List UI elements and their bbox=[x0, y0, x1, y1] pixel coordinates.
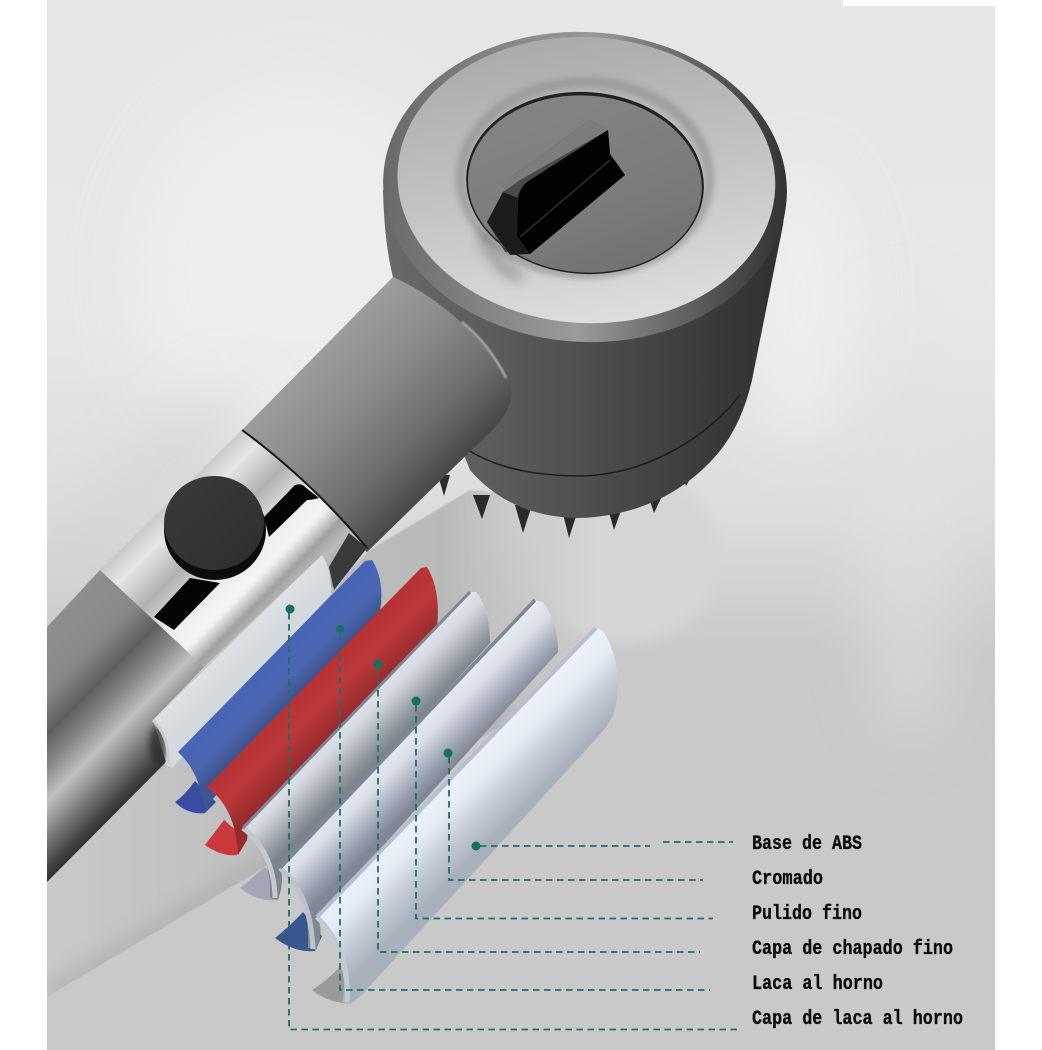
slot grip bbox=[487, 120, 625, 255]
collar joint lines bbox=[242, 430, 367, 548]
leader line: Capa de chapado fino bbox=[374, 660, 700, 952]
shadow under the handle bbox=[47, 490, 544, 996]
collar dark wedge bbox=[329, 533, 367, 590]
upper handle neck bbox=[242, 277, 512, 552]
dark handle end bbox=[149, 725, 167, 765]
layer: grey thin plating bbox=[240, 592, 490, 900]
layer: ABS base bbox=[153, 555, 331, 768]
bristles bbox=[438, 470, 695, 538]
shower head bbox=[375, 22, 795, 538]
top disc bbox=[460, 84, 710, 282]
layer: chrome blue bbox=[175, 560, 381, 813]
label: Base de ABS: Base de ABS bbox=[752, 833, 862, 856]
leader line: Laca al horno bbox=[336, 625, 710, 990]
layer: grey baked lacquer bbox=[275, 600, 558, 951]
neck highlight bbox=[462, 322, 506, 378]
label: Laca al horno: Laca al horno bbox=[752, 973, 883, 996]
handle bbox=[47, 277, 512, 882]
rim shading around disc bbox=[461, 82, 709, 278]
bottom section seam bbox=[468, 395, 740, 476]
label: Capa de laca al horno: Capa de laca al horno bbox=[752, 1008, 963, 1031]
layered cutaway strips bbox=[153, 555, 617, 1004]
leader line: Pulido fino bbox=[412, 696, 713, 918]
label: Pulido fino: Pulido fino bbox=[752, 903, 862, 926]
black collar reflection upper bbox=[264, 484, 319, 537]
label: Cromado: Cromado bbox=[752, 868, 823, 891]
layer: red polish bbox=[205, 567, 438, 855]
lower handle bbox=[47, 570, 204, 882]
layer: baked lacquer coat bbox=[312, 628, 617, 1004]
chrome collar bbox=[100, 430, 367, 667]
body lip bbox=[375, 22, 795, 352]
black collar reflection lower bbox=[154, 578, 220, 630]
leader line: Base de ABS bbox=[472, 842, 733, 850]
soft shadow under the head bbox=[588, 491, 678, 638]
slider button bbox=[164, 476, 266, 580]
head body bbox=[383, 190, 787, 518]
leader line: Cromado bbox=[444, 748, 703, 880]
top rim bbox=[390, 27, 783, 333]
labels bbox=[752, 833, 963, 1031]
leader line: Capa de laca al horno bbox=[286, 604, 738, 1030]
label: Capa de chapado fino: Capa de chapado fino bbox=[752, 938, 953, 961]
